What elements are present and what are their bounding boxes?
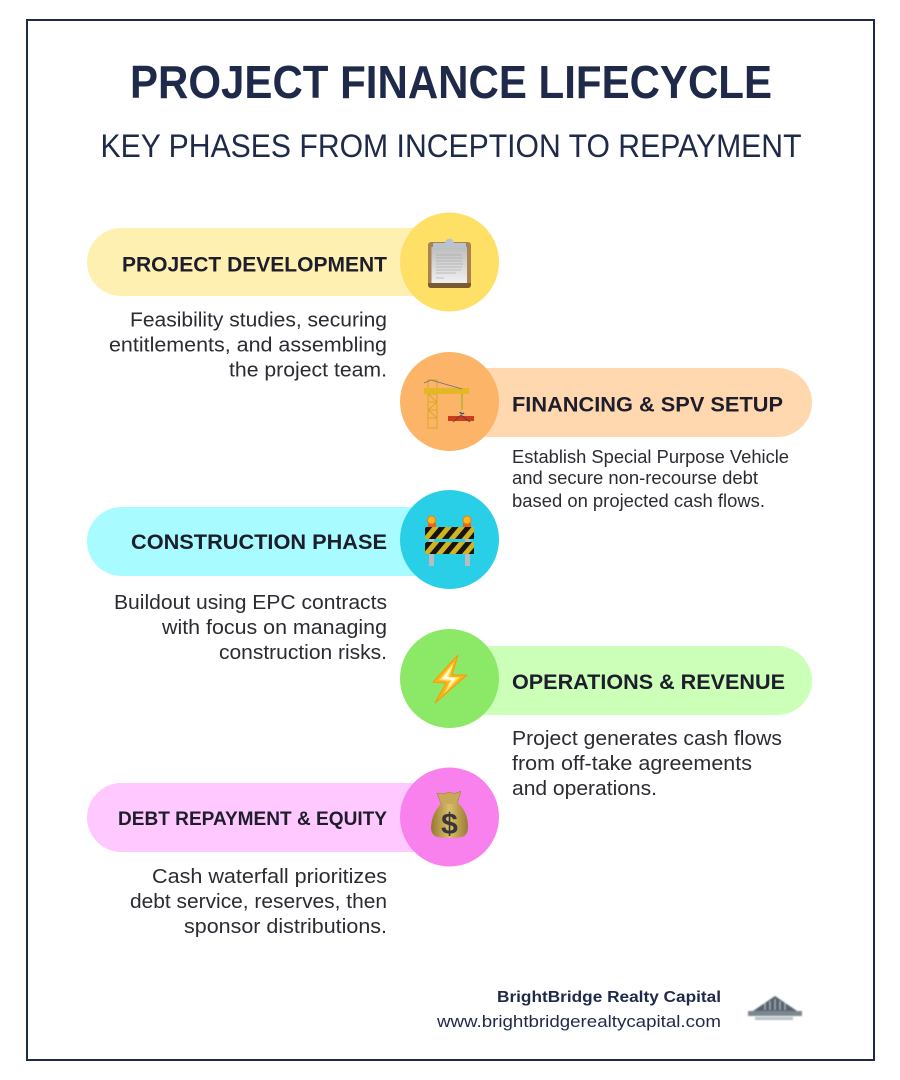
description: project development (109, 310, 387, 382)
circle: operations (400, 629, 499, 728)
logo: BrightBridge (748, 996, 802, 1020)
description: operations: Project generates cash flows (512, 728, 782, 750)
phase 3: construction (87, 490, 499, 664)
description: construction (114, 592, 387, 664)
description: operations: from off-take agreements (512, 753, 752, 775)
icon: road barrier (425, 516, 474, 566)
phase 5: debt repayment (87, 768, 499, 938)
heading: operations: OPERATIONS & REVENUE (512, 671, 785, 694)
description: financing (512, 447, 789, 511)
description: construction: construction risks. (219, 642, 387, 664)
heading: financing: FINANCING & SPV SETUP (512, 394, 783, 416)
description: financing: Establish Special Purpose Vehicle (512, 447, 789, 467)
phase 4: operations (400, 629, 812, 800)
icon: crane (424, 380, 474, 428)
circle: project development (400, 212, 499, 312)
pill: financing (452, 368, 812, 437)
description: debt repayment: debt service, reserves, then (130, 891, 387, 913)
description: debt repayment (130, 866, 387, 938)
phase 1: project development (87, 212, 499, 382)
description: construction: with focus on managing (161, 617, 387, 639)
description: debt repayment: Cash waterfall prioritizes (152, 866, 387, 888)
description: financing: based on projected cash flows. (512, 491, 765, 511)
icon: money bag: $ (441, 808, 458, 841)
description: financing: and secure non-recourse debt (512, 468, 758, 488)
footer: company name: BrightBridge Realty Capital (497, 989, 721, 1006)
description: construction: Buildout using EPC contracts (114, 592, 387, 614)
footer: website: www.brightbridgerealtycapital.com (436, 1013, 721, 1031)
subtitle: KEY PHASES FROM INCEPTION TO REPAYMENT (100, 128, 802, 164)
icon: money bag (431, 791, 468, 841)
description: project development: Feasibility studies, securing (130, 310, 387, 332)
description: operations: and operations. (512, 778, 657, 800)
pill: debt repayment (87, 783, 447, 852)
heading: debt repayment: DEBT REPAYMENT & EQUITY (118, 809, 387, 830)
phase 2: financing and SPV setup (400, 352, 812, 511)
pill: construction (87, 507, 447, 576)
circle: financing (400, 352, 499, 451)
title: PROJECT FINANCE LIFECYCLE (130, 56, 772, 108)
icon: clipboard (428, 238, 471, 288)
description: debt repayment: sponsor distributions. (184, 916, 387, 938)
description: project development: the project team. (229, 360, 387, 382)
pill: project development (87, 228, 447, 296)
heading: project development: PROJECT DEVELOPMENT (122, 254, 387, 276)
heading: construction: CONSTRUCTION PHASE (131, 531, 387, 554)
circle: construction (400, 490, 499, 589)
icon: lightning bolt (433, 655, 467, 703)
description: operations (512, 728, 782, 800)
circle: debt repayment (400, 768, 499, 866)
pill: operations (452, 646, 812, 715)
description: project development: entitlements, and assembling (109, 334, 387, 356)
